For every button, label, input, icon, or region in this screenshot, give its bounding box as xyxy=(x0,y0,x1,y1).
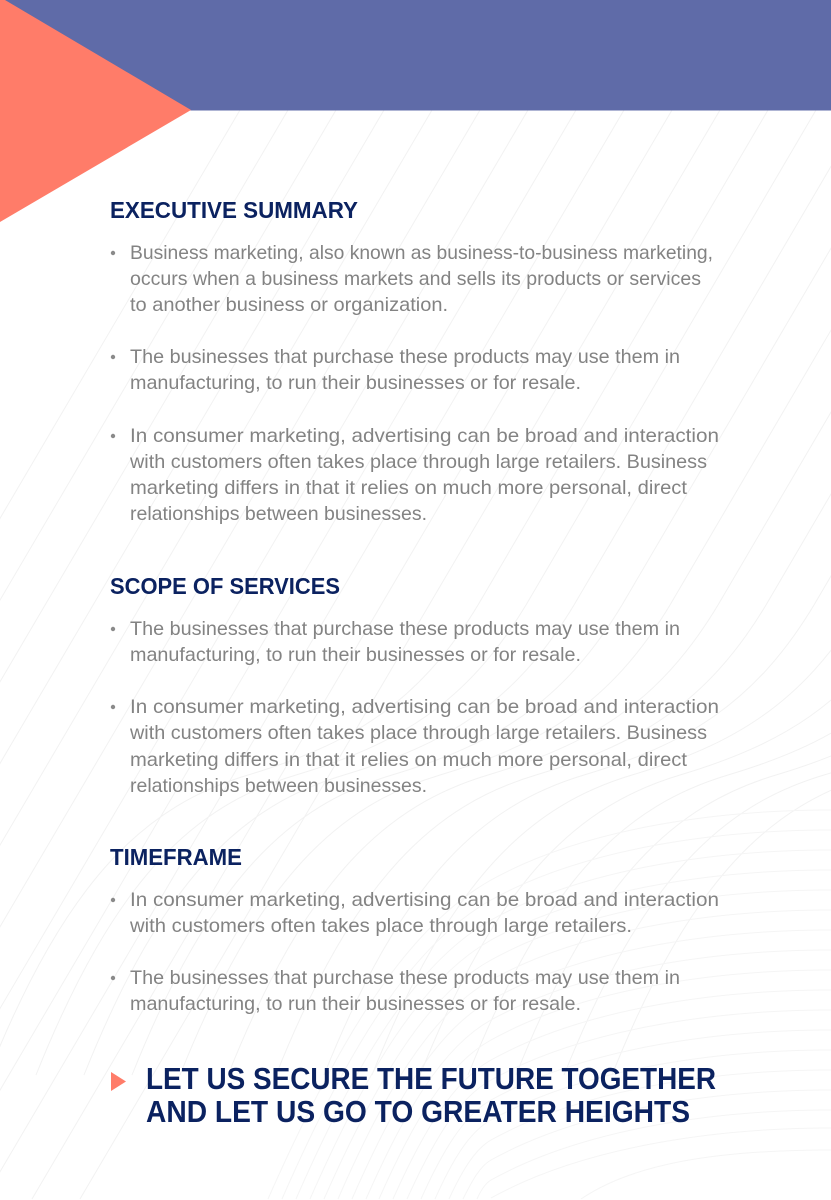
bullet text: consumer marketing xyxy=(111,889,719,937)
header banner xyxy=(0,0,831,110)
section: timeframe xyxy=(110,844,719,1015)
closing statement xyxy=(146,1061,716,1129)
bullet text: consumer marketing comparison: In consumer marketing, advertising can be broad and interaction xyxy=(130,696,719,718)
bullet text: consumer marketing comparison xyxy=(111,696,719,797)
bullet text: business marketing definition: Business marketing, also known as business-to-business marketing, xyxy=(130,242,713,264)
bullet text: purchasing businesses: manufacturing, to run their businesses or for resale. xyxy=(130,644,581,666)
bullet text: consumer marketing: with customers often takes place through large retailers. xyxy=(129,915,632,937)
heading: timeframe: TIMEFRAME xyxy=(110,844,242,870)
bullet text: consumer marketing comparison xyxy=(111,425,719,525)
section: executive summary xyxy=(110,197,719,525)
bullet text: consumer marketing comparison: relationships between businesses. xyxy=(130,503,427,525)
coral corner triangle xyxy=(0,0,191,222)
bullet text: consumer marketing comparison: marketing differs in that it relies on much more personal, direct xyxy=(130,749,688,771)
closing statement: LET US SECURE THE FUTURE TOGETHER xyxy=(146,1061,716,1096)
bullet text: purchasing businesses xyxy=(111,967,680,1015)
bullet text: purchasing businesses xyxy=(111,346,680,394)
bullet text: business marketing definition xyxy=(111,242,713,316)
bullet text: purchasing businesses xyxy=(111,618,680,666)
bullet text: consumer marketing: In consumer marketing, advertising can be broad and interaction xyxy=(130,889,719,911)
bullet text: business marketing definition: occurs when a business markets and sells its products or services xyxy=(130,268,701,290)
bullet text: business marketing definition: to another business or organization. xyxy=(130,294,448,316)
bullet text: consumer marketing comparison: marketing differs in that it relies on much more personal, direct xyxy=(130,477,688,499)
bullet text: purchasing businesses: manufacturing, to run their businesses or for resale. xyxy=(130,372,581,394)
bullet text: consumer marketing comparison: with customers often takes place through large retailers. Business xyxy=(129,451,707,473)
bullet text: purchasing businesses: The businesses that purchase these products may use them in xyxy=(130,967,680,989)
bullet text: consumer marketing comparison: with customers often takes place through large retailers. Business xyxy=(129,722,707,744)
icon: coral arrow marker xyxy=(111,1072,126,1091)
bullet text: purchasing businesses: The businesses that purchase these products may use them in xyxy=(130,618,680,640)
bullet text: purchasing businesses: The businesses that purchase these products may use them in xyxy=(130,346,680,368)
bullet text: consumer marketing comparison: In consumer marketing, advertising can be broad and interaction xyxy=(130,425,719,447)
section: scope of services xyxy=(110,573,719,797)
heading: scope of services: SCOPE OF SERVICES xyxy=(110,573,340,599)
bullet text: consumer marketing comparison: relationships between businesses. xyxy=(130,775,427,797)
closing statement: AND LET US GO TO GREATER HEIGHTS xyxy=(146,1094,690,1129)
bullet text: purchasing businesses: manufacturing, to run their businesses or for resale. xyxy=(130,993,581,1015)
heading: executive summary: EXECUTIVE SUMMARY xyxy=(110,197,358,223)
